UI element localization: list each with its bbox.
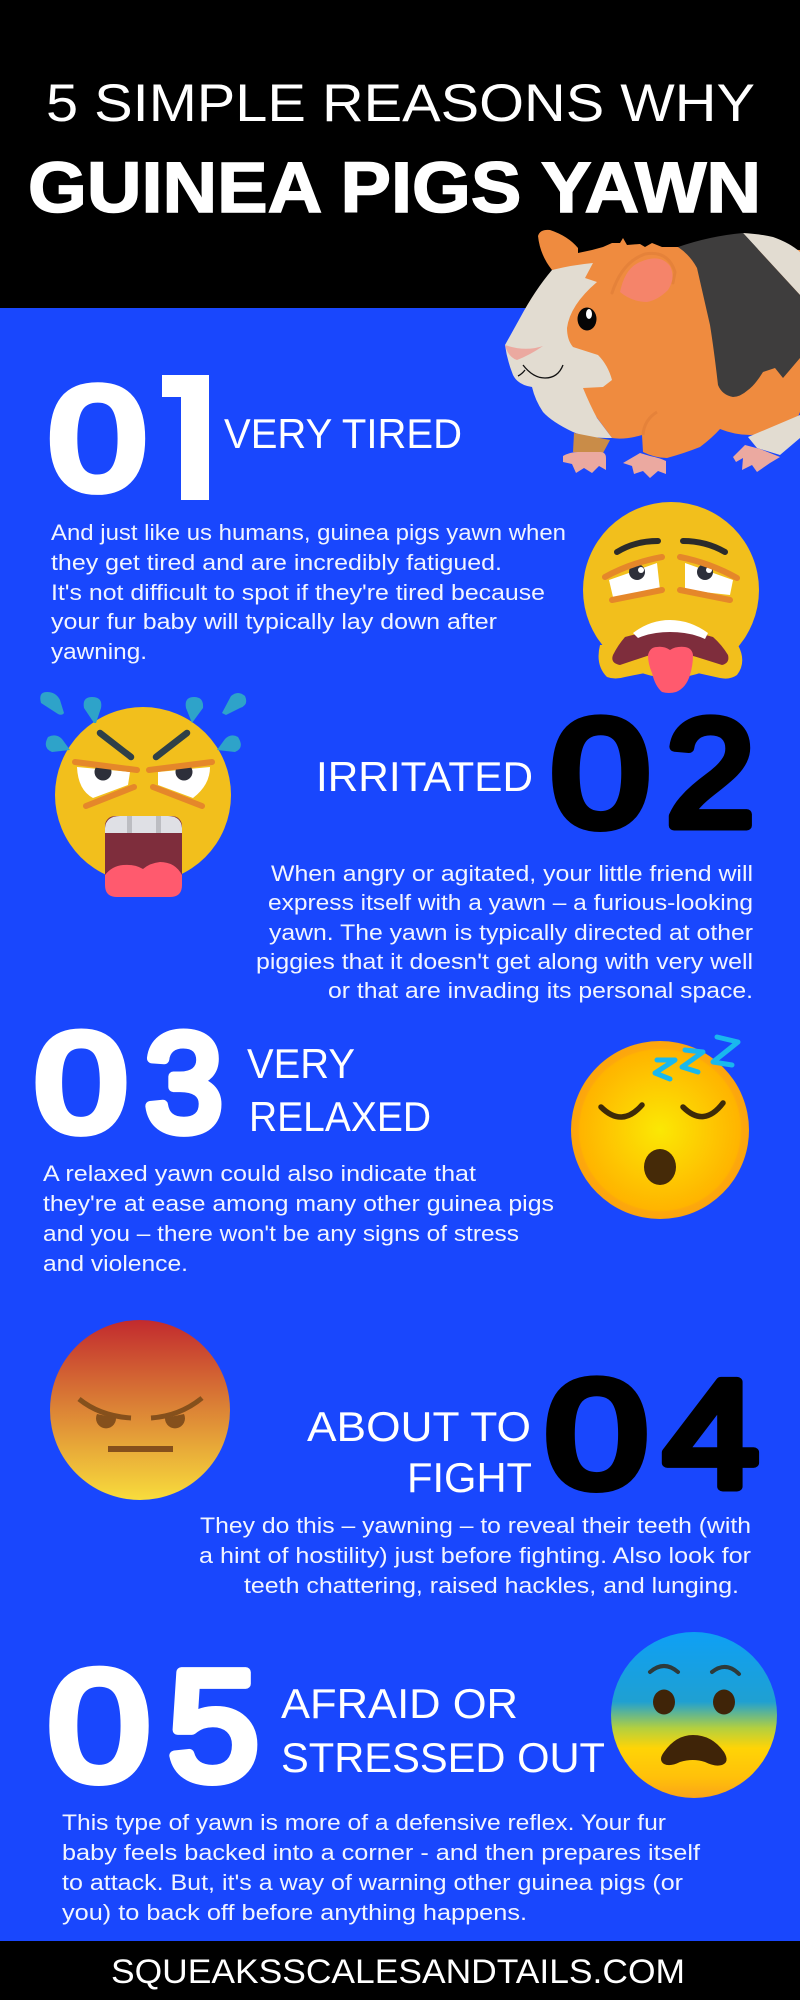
icon: tired face	[583, 502, 759, 693]
section 01	[49, 358, 759, 693]
body text 04	[199, 1513, 751, 1598]
body text 01: It's not difficult to spot if they're tired because	[51, 580, 545, 605]
footer url: SQUEAKSSCALESANDTAILS.COM	[111, 1953, 685, 1991]
number 03	[35, 1006, 223, 1160]
body text 05: This type of yawn is more of a defensive reflex. Your fur	[62, 1810, 666, 1835]
heading: irritated: IRRITATED	[316, 753, 533, 800]
body text 03: they're at ease among many other guinea pigs	[43, 1191, 554, 1216]
body text 03: A relaxed yawn could also indicate that	[43, 1161, 476, 1186]
heading: very tired: VERY TIRED	[224, 410, 462, 457]
section 03	[35, 1006, 749, 1276]
number 04: 0	[545, 1350, 648, 1520]
heading: about to fight: FIGHT	[407, 1454, 532, 1501]
heading: very relaxed	[247, 1040, 431, 1140]
heading: afraid or stressed out	[281, 1680, 605, 1781]
heading: very relaxed: VERY	[247, 1040, 355, 1087]
icon: irritated face	[40, 692, 246, 897]
section 05	[48, 1632, 777, 1925]
number 03: 0	[35, 1006, 127, 1160]
body text 02: or that are invading its personal space.	[328, 978, 753, 1003]
section 04	[50, 1320, 758, 1598]
number 05: 5	[168, 1640, 259, 1814]
header band	[0, 0, 800, 308]
body text 03	[43, 1161, 554, 1276]
number 01: 1	[150, 358, 250, 520]
body text 02: express itself with a yawn – a furious-looking	[268, 890, 753, 915]
body text 01: they get tired and are incredibly fatigued.	[51, 550, 502, 575]
body text 02: yawn. The yawn is typically directed at other	[269, 920, 753, 945]
number 04	[545, 1350, 758, 1520]
icon: sleepy face	[571, 1037, 749, 1219]
body text 04: teeth chattering, raised hackles, and lunging.	[244, 1573, 739, 1598]
number 03: 3	[145, 1006, 223, 1160]
body text 05	[62, 1810, 701, 1925]
number 05	[48, 1640, 259, 1814]
heading: about to fight: ABOUT TO	[307, 1403, 531, 1450]
icon: angry face	[50, 1320, 230, 1500]
body text 04: They do this – yawning – to reveal their teeth (with	[200, 1513, 751, 1538]
heading: afraid or stressed out: STRESSED OUT	[281, 1734, 605, 1781]
body text 01: yawning.	[51, 639, 147, 664]
body text 01: And just like us humans, guinea pigs yawn when	[51, 520, 566, 545]
section 02	[40, 688, 755, 1003]
heading: very relaxed: RELAXED	[249, 1093, 431, 1140]
heading: about to fight	[307, 1403, 532, 1501]
number 04: 4	[664, 1350, 758, 1520]
heading: afraid or stressed out: AFRAID OR	[281, 1680, 518, 1727]
number 02	[551, 688, 755, 858]
icon: scared face	[611, 1632, 777, 1798]
body text 02: When angry or agitated, your little friend will	[271, 861, 753, 886]
body text 05: to attack. But, it's a way of warning other guinea pigs (or	[62, 1870, 683, 1895]
number 01: 0	[49, 358, 146, 520]
number 02: 2	[666, 688, 755, 858]
body text 05: baby feels backed into a corner - and then prepares itself	[62, 1840, 701, 1865]
title	[28, 74, 761, 228]
footer band	[0, 1941, 800, 2000]
number 05: 0	[48, 1640, 150, 1814]
body text 04: a hint of hostility) just before fighting. Also look for	[199, 1543, 751, 1568]
icon: guinea pig	[505, 230, 800, 478]
body text 02	[256, 861, 753, 1003]
body text 03: and you – there won't be any signs of stress	[43, 1221, 519, 1246]
body text 03: and violence.	[43, 1251, 188, 1276]
body text 01: your fur baby will typically lay down after	[51, 609, 497, 634]
body text 01	[51, 520, 566, 664]
number 01	[49, 358, 259, 520]
title: 5 SIMPLE REASONS WHY	[46, 74, 755, 133]
number 02: 0	[551, 688, 650, 858]
title: GUINEA PIGS YAWN	[28, 149, 761, 228]
body text 02: piggies that it doesn't get along with very well	[256, 949, 753, 974]
body text 05: you) to back off before anything happens.	[62, 1900, 527, 1925]
